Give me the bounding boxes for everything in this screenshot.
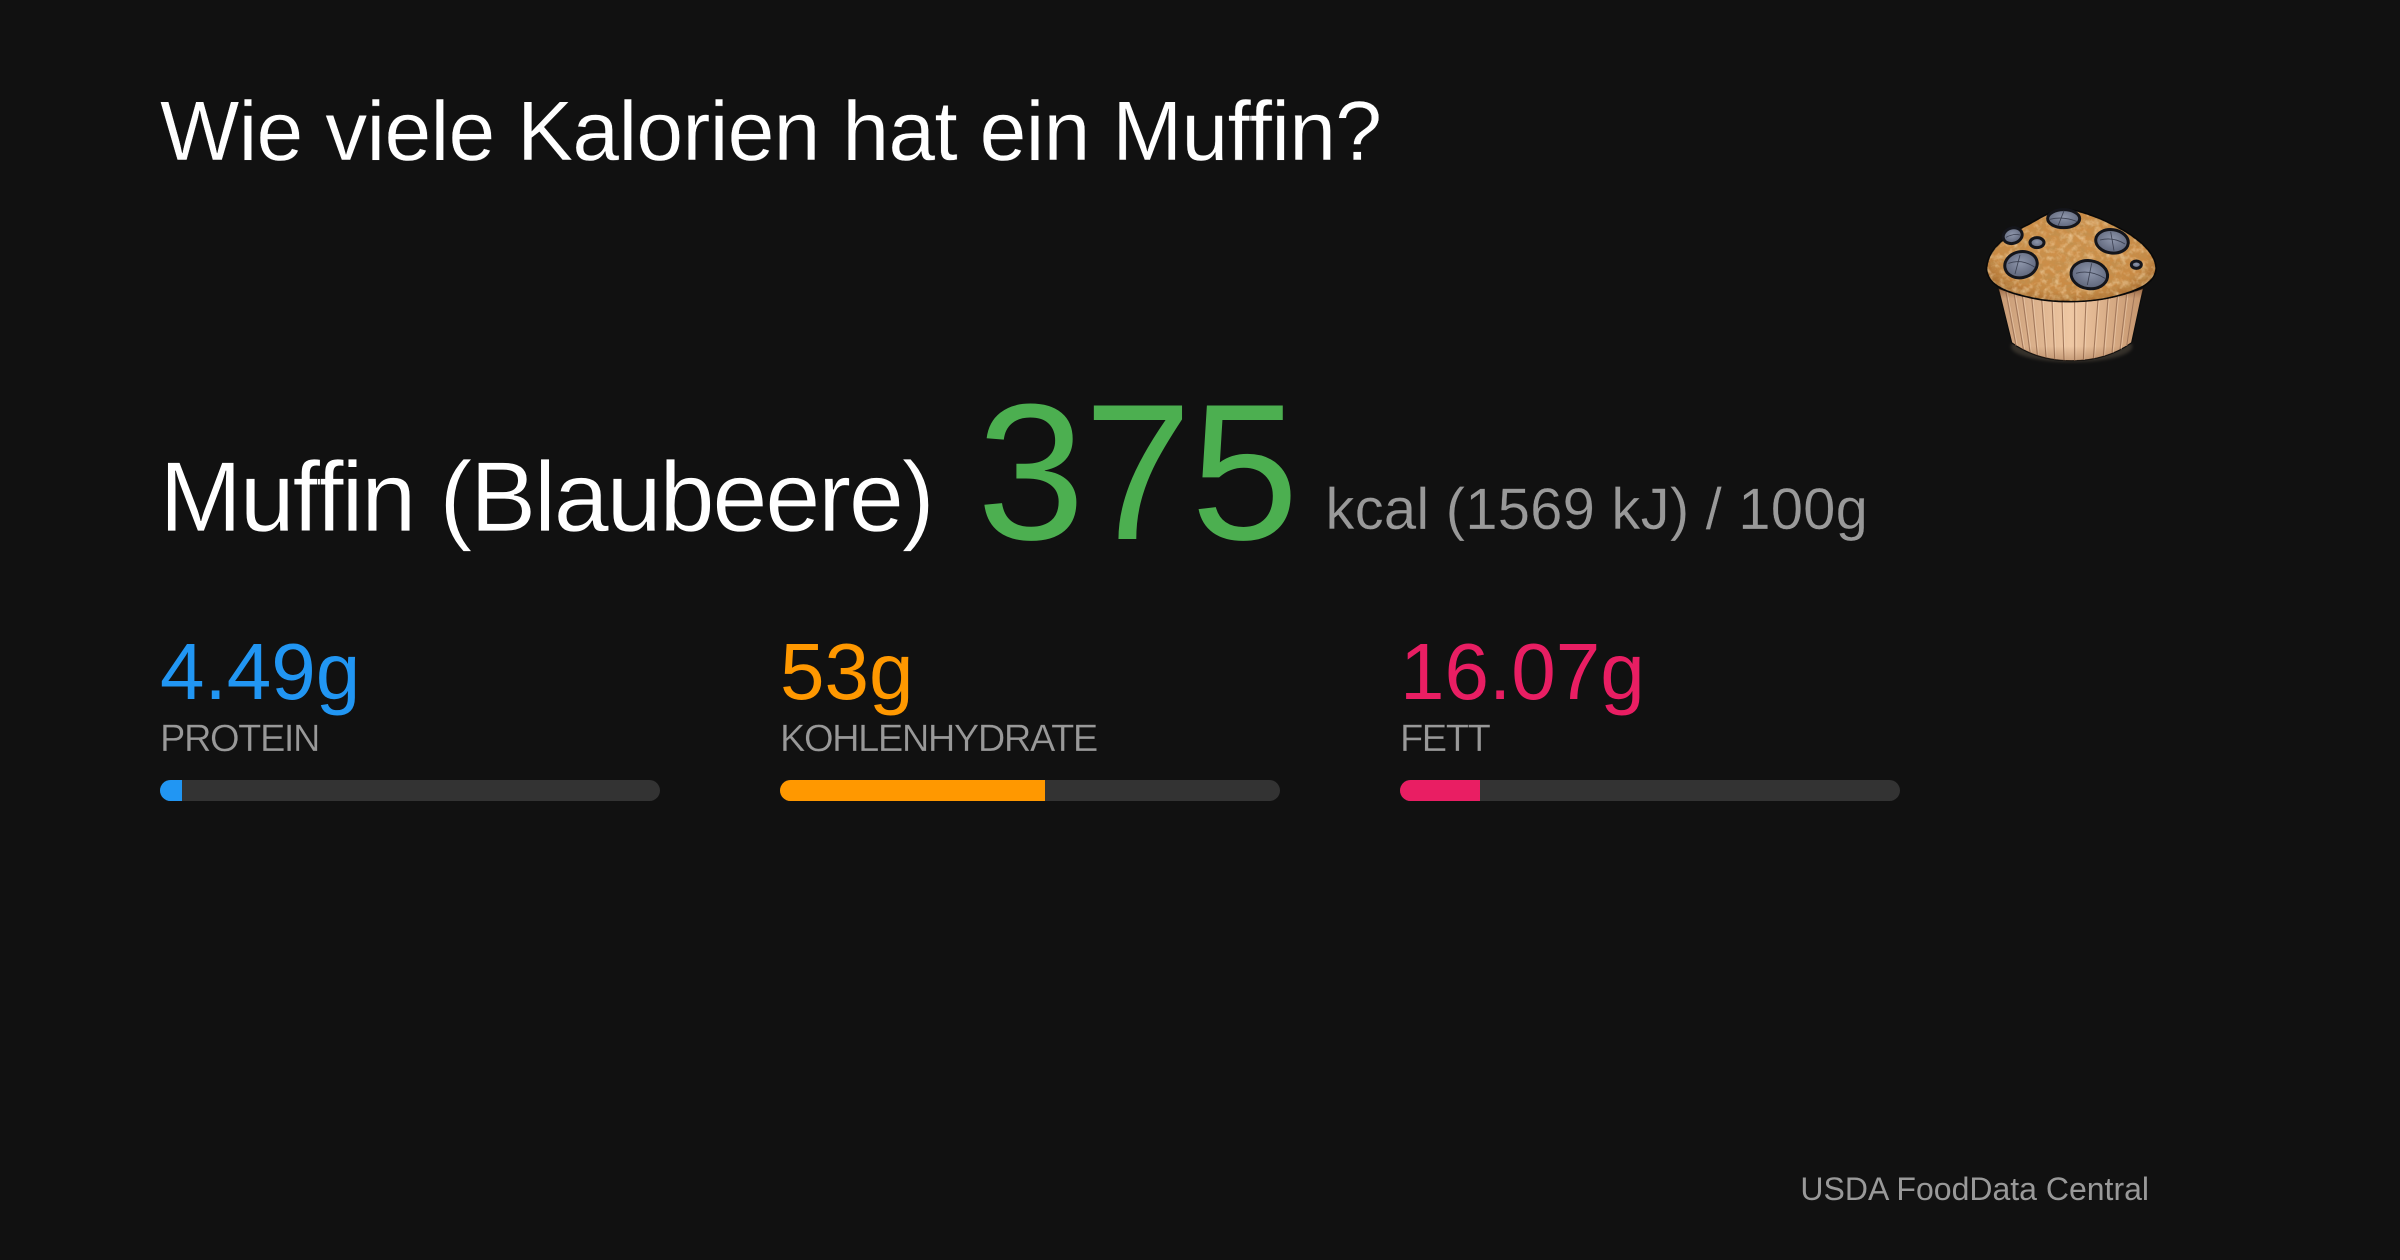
fat value: 16.07g xyxy=(1400,627,1645,716)
carbohydrates bar xyxy=(780,780,1280,801)
cupcake liner xyxy=(1998,288,2143,361)
protein value: 4.49g xyxy=(160,627,360,716)
title: Wie viele Kalorien hat ein Muffin? xyxy=(160,84,1381,178)
protein label: PROTEIN xyxy=(160,718,319,760)
calorie unit: kcal (1569 kJ) / 100g xyxy=(1326,477,1868,542)
carbohydrates value: 53g xyxy=(780,627,913,716)
calorie value: 375 xyxy=(977,364,1298,581)
fat bar xyxy=(1400,780,1900,801)
carbohydrates label: KOHLENHYDRATE xyxy=(780,718,1097,760)
food name: Muffin (Blaubeere) xyxy=(160,441,932,552)
muffin top xyxy=(1987,209,2156,302)
macro: carbohydrates xyxy=(780,627,1097,760)
cup shadow xyxy=(2011,331,2132,362)
protein bar xyxy=(160,780,660,801)
fat label: FETT xyxy=(1400,718,1489,760)
blueberry creases xyxy=(2006,211,2125,285)
icon: blueberry muffin xyxy=(1986,208,2156,363)
blueberries xyxy=(2001,210,2141,291)
macro: protein xyxy=(160,627,360,760)
macro: fat xyxy=(1400,627,1645,760)
source: USDA FoodData Central xyxy=(1800,1171,2149,1207)
